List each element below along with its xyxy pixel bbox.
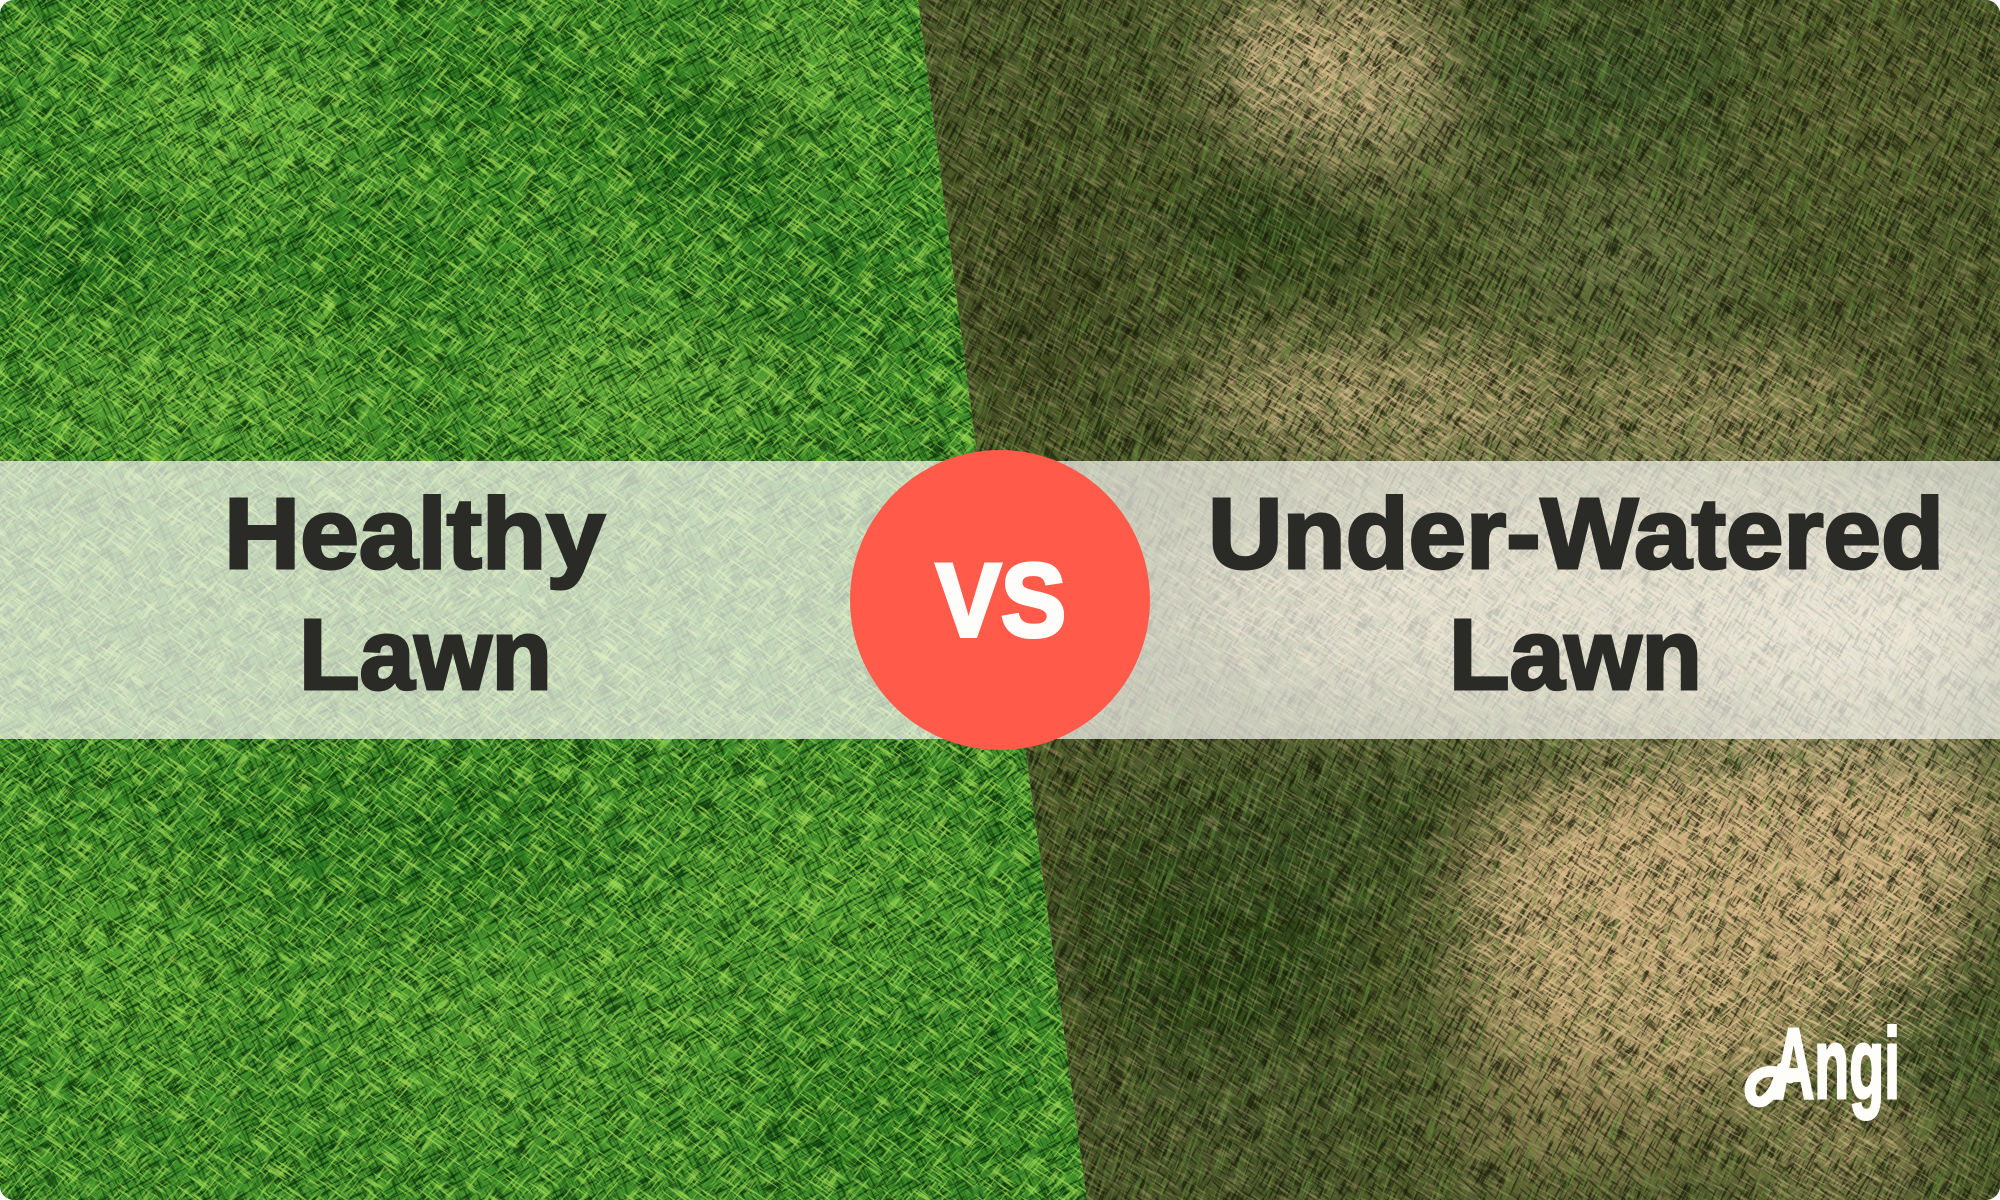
heading: Under-Watered Lawn xyxy=(1208,478,1944,711)
heading: Under-Watered Lawn: Under-Watered xyxy=(1208,478,1944,590)
photo: healthy green lawn xyxy=(0,0,1100,1200)
heading: Healthy Lawn: Lawn xyxy=(299,599,552,711)
VS badge: VS xyxy=(936,543,1066,659)
heading: Healthy Lawn: Healthy xyxy=(224,478,605,590)
photo: under-watered patchy lawn xyxy=(900,0,2000,1200)
Angi logo: Angi xyxy=(1773,1008,1900,1120)
translucent title band xyxy=(0,461,2000,739)
heading: Under-Watered Lawn: Lawn xyxy=(1449,599,1702,711)
VS badge xyxy=(850,450,1150,750)
heading: Healthy Lawn xyxy=(224,478,605,711)
Angi logo xyxy=(1750,1008,1900,1120)
